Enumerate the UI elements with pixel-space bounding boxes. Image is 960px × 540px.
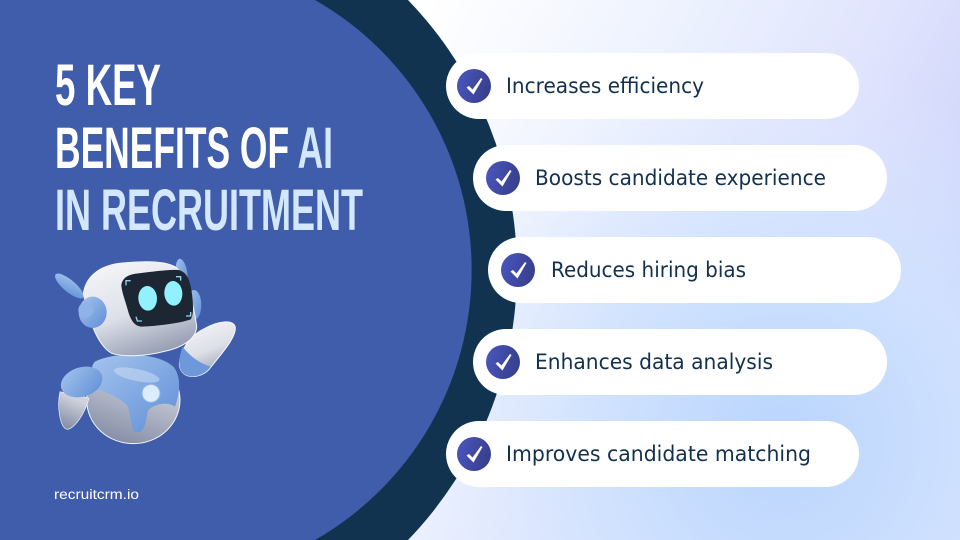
benefit text: Boosts candidate experience [535, 166, 826, 190]
check icon [457, 69, 491, 103]
robot ear [78, 297, 107, 328]
robot left arm [57, 361, 106, 429]
robot eyes [137, 280, 183, 311]
robot screen brackets [126, 277, 191, 321]
robot screen [121, 270, 193, 327]
title [55, 53, 363, 243]
title: BENEFITS OF AI [55, 116, 333, 181]
robot head [83, 262, 197, 356]
robot raised arm [179, 322, 235, 377]
benefit pill: boosts candidate experience [473, 145, 887, 211]
check icon [486, 345, 520, 379]
benefit pill: improves candidate matching [446, 421, 859, 487]
robot illustration [52, 258, 235, 444]
title: IN RECRUITMENT [55, 178, 363, 243]
check icon [457, 437, 491, 471]
check icon [486, 161, 520, 195]
benefit text: Improves candidate matching [506, 442, 811, 466]
benefit text: Enhances data analysis [535, 350, 773, 374]
check icon [501, 253, 535, 287]
blue circle panel [0, 0, 472, 540]
dark navy circle [0, 0, 517, 540]
robot body [87, 355, 180, 444]
benefit text: Reduces hiring bias [551, 258, 746, 282]
benefit pill: increases efficiency [446, 53, 859, 119]
benefit text: Increases efficiency [506, 74, 704, 98]
robot antennas [52, 258, 201, 320]
benefit pill: reduces hiring bias [488, 237, 901, 303]
benefit pill: enhances data analysis [473, 329, 887, 395]
website label: recruitcrm.io [54, 487, 139, 502]
title: 5 KEY [55, 53, 161, 118]
